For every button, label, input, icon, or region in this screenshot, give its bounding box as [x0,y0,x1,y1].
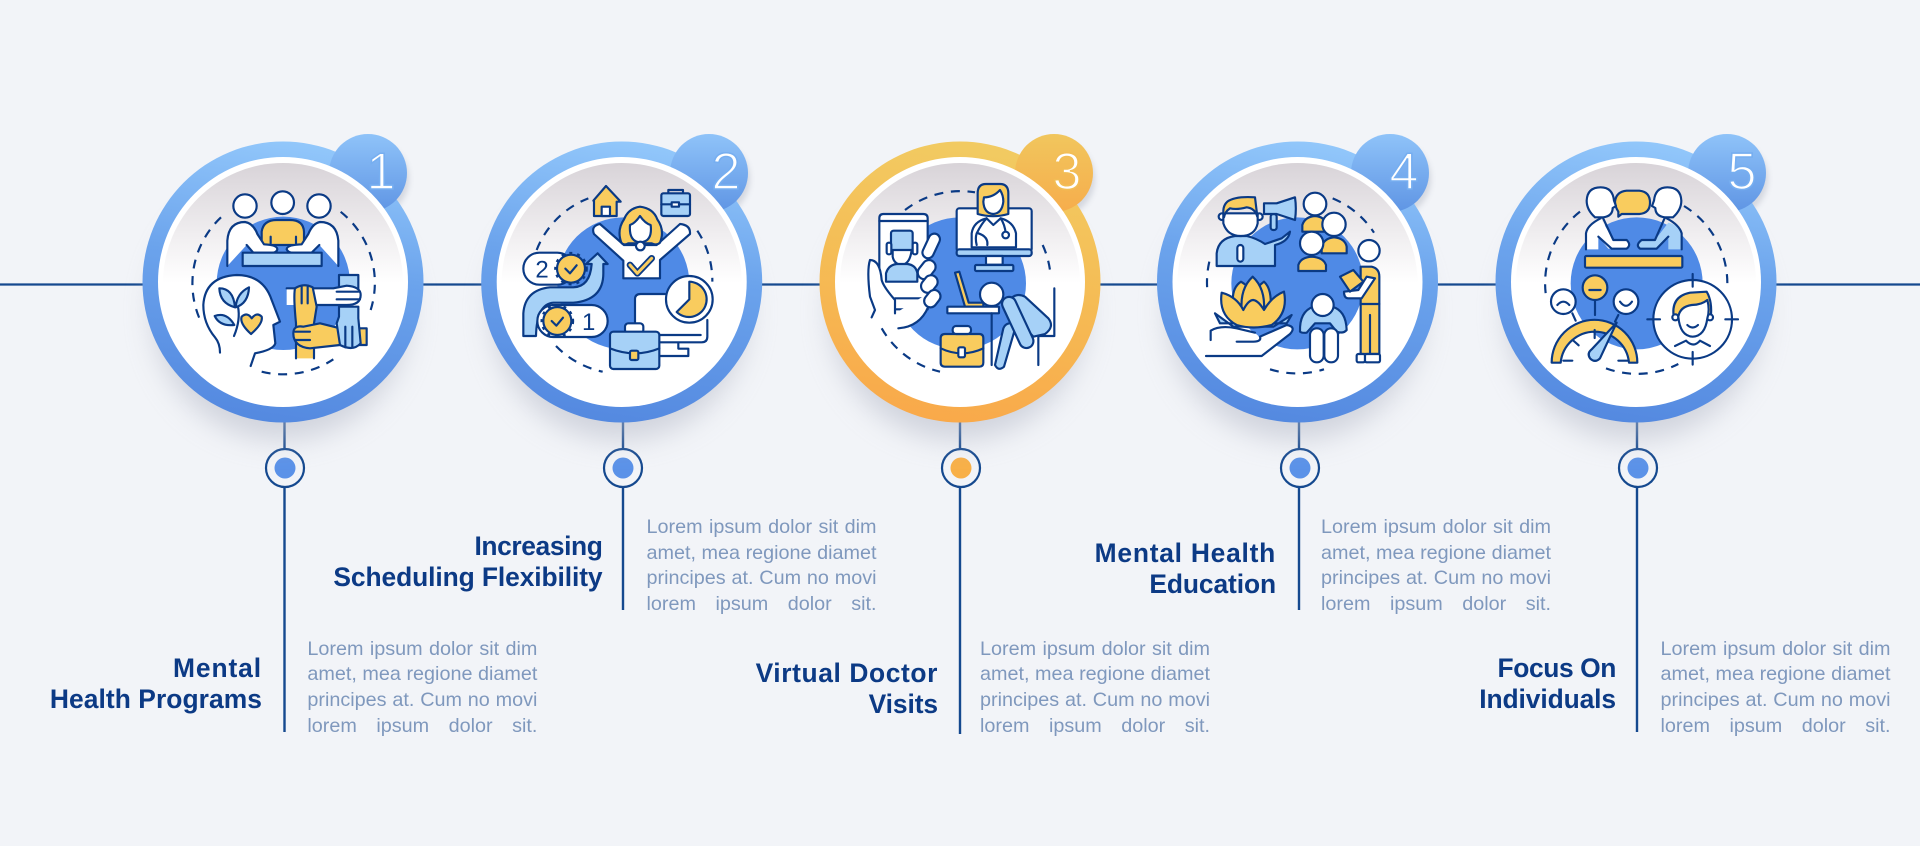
title: Focus On Individuals: Focus On [1498,653,1616,683]
description text 1 [307,638,538,737]
title: Mental Health Education: Mental Health [1095,538,1276,568]
description text 4 [1321,516,1551,615]
description text 2: Lorem ipsum dolor sit dim [646,516,876,538]
description text 4: principes at. Cum no movi [1321,567,1551,589]
description text 1: principes at. Cum no movi [307,689,537,711]
panel: step 5 Focus On Individuals [1479,134,1890,737]
icon: conversation, mood gauge and targeted individual [1545,187,1738,374]
title: Virtual Doctor Visits: Visits [869,688,938,718]
circle badge 5 [1496,134,1776,440]
description text 4: Lorem ipsum dolor sit dim [1321,516,1551,538]
icon: flexible schedule with priorities, work and clock: 1 [582,309,595,336]
icon: telehealth doctor, phone call and tired worker [868,184,1054,372]
title: Mental Health Education [1095,538,1276,599]
circle badge 2 [481,134,762,440]
description text 5: amet, mea regione diamet [1660,663,1890,685]
title: Mental Health Programs [50,653,262,714]
description text 1: lorem ipsum dolor sit. [307,715,537,737]
description text 5 [1660,638,1890,737]
circle badge 1: 1 [367,143,395,201]
description text 3: lorem ipsum dolor sit. [980,715,1210,737]
panel: step 4 Mental Health Education [1095,134,1551,615]
circle badge 1 [142,134,424,440]
description text 4: lorem ipsum dolor sit. [1321,593,1551,615]
stem line and marker 3 [942,420,980,734]
description text 5: lorem ipsum dolor sit. [1660,715,1890,737]
icon: speaker educating group, lotus and seated person [1206,193,1380,373]
icon: flexible schedule with priorities, work and clock [523,186,713,372]
title: Focus On Individuals [1479,653,1616,714]
title: Mental Health Education: Education [1149,569,1276,599]
stem line and marker 4 [1281,420,1319,610]
title: Virtual Doctor Visits [756,658,938,718]
circle badge 2: 2 [712,143,740,201]
title: Mental Health Programs: Mental [173,653,262,683]
description text 3: amet, mea regione diamet [980,663,1210,685]
circle badge 5: 5 [1728,143,1756,201]
description text 3: Lorem ipsum dolor sit dim [980,638,1210,660]
panel: step 3 Virtual Doctor Visits [756,134,1210,737]
description text 5: Lorem ipsum dolor sit dim [1660,638,1890,660]
panel: step 1 Mental Health Programs [50,134,538,737]
icon: team meeting, mind and joined hands [192,191,375,374]
description text 5: principes at. Cum no movi [1660,689,1890,711]
title: Mental Health Programs: Health Programs [50,684,262,714]
title: Focus On Individuals: Individuals [1479,684,1616,714]
description text 1: Lorem ipsum dolor sit dim [307,638,537,660]
description text 2 [646,516,876,615]
stem line and marker 2 [604,420,642,610]
description text 4: amet, mea regione diamet [1321,542,1551,564]
stem line and marker 5 [1619,420,1657,732]
circle badge 4 [1157,134,1438,440]
description text 2: principes at. Cum no movi [646,567,876,589]
circle badge 3: 3 [1053,143,1081,201]
icon: flexible schedule with priorities, work and clock: 2 [535,256,549,283]
title: Increasing Scheduling Flexibility: Increasing [474,531,602,561]
description text 1: amet, mea regione diamet [307,663,537,685]
stem line and marker 1 [266,420,304,732]
circle badge 3 [820,134,1100,440]
description text 2: lorem ipsum dolor sit. [646,593,876,615]
title: Increasing Scheduling Flexibility: Scheduling Flexibility [333,562,602,592]
title: Virtual Doctor Visits: Virtual Doctor [756,658,938,688]
panel: step 2 Increasing Scheduling Flexibility [333,134,876,615]
description text 2: amet, mea regione diamet [646,542,876,564]
description text 3 [980,638,1210,737]
description text 3: principes at. Cum no movi [980,689,1210,711]
circle badge 4: 4 [1390,143,1418,201]
title: Increasing Scheduling Flexibility [333,531,602,592]
